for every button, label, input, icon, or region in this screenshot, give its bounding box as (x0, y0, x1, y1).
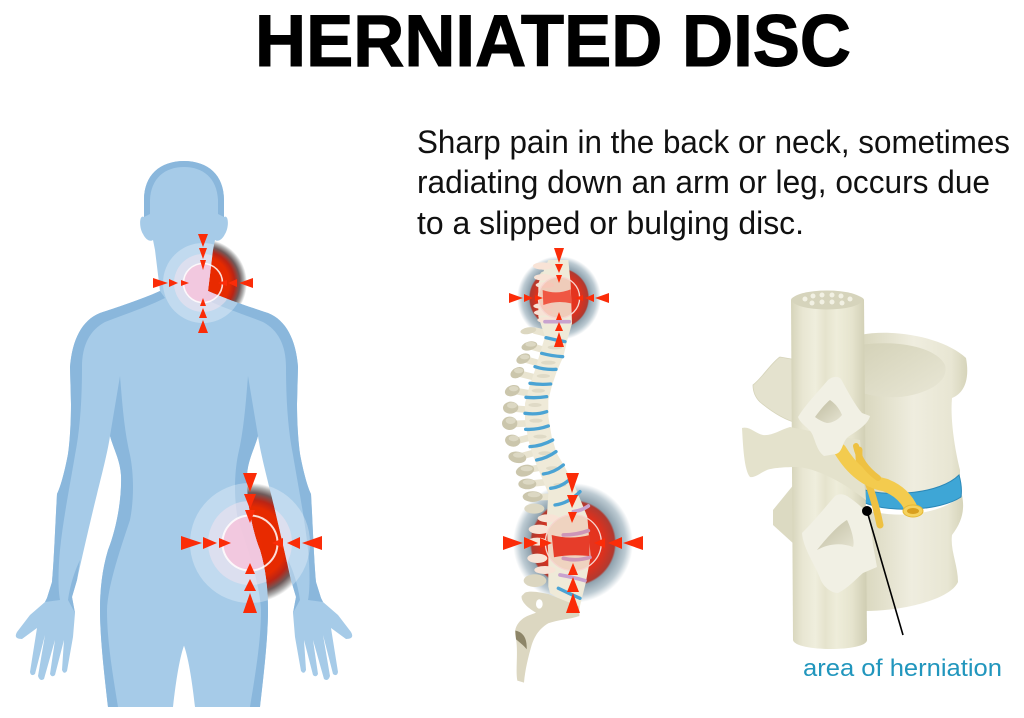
lumbar pain glow (513, 483, 633, 603)
lower facet (802, 494, 877, 593)
label: area of herniation: area of herniation (803, 655, 1002, 682)
pain rings on body (163, 243, 310, 603)
lumbar spine arrows (503, 473, 643, 613)
neck pain glow behind body (159, 239, 247, 327)
spine illustration (502, 260, 601, 683)
description text (417, 124, 1010, 241)
process necks (511, 266, 560, 497)
spinous processes (502, 326, 544, 514)
panel: vertebra cross-section (742, 290, 1002, 682)
nerve roots (840, 446, 912, 525)
left upper process (753, 357, 797, 423)
lower wing process (773, 483, 795, 545)
description text: radiating down an arm or leg, occurs due (417, 164, 990, 200)
cord top with fibre dots (792, 290, 862, 310)
vertebral shading (528, 345, 567, 487)
upper spine pain glow (517, 256, 601, 340)
upper facet (798, 377, 870, 456)
panel: human body with pain points (16, 161, 352, 707)
blue intervertebral disc (865, 475, 961, 509)
lower back pain glow behind body (190, 483, 310, 603)
neck pain arrows (153, 234, 253, 333)
red overlay on upper spine (538, 277, 580, 318)
lavender discs in pain areas (545, 322, 590, 581)
lower back pain arrows (181, 473, 322, 613)
body shading bands (45, 161, 323, 707)
body silhouette (16, 161, 352, 707)
nerve opening (903, 505, 923, 517)
pink lumps in pain areas (524, 262, 559, 587)
sacrum and coccyx (515, 592, 579, 683)
title: HERNIATED DISC (255, 1, 851, 82)
white target rings (184, 264, 278, 570)
description text: to a slipped or bulging disc. (417, 205, 804, 241)
white target rings on spine (538, 277, 580, 318)
upper spine arrows (509, 248, 609, 347)
spinal cord cylinder (791, 292, 867, 649)
panel: spine with pain points (502, 248, 643, 683)
red overlay on lumbar spine (545, 515, 601, 571)
upper vertebra body (860, 333, 967, 496)
transverse process (742, 427, 866, 500)
blue discs (525, 338, 580, 598)
vertebra concavity (860, 343, 946, 397)
callout: herniation pointer (862, 506, 903, 635)
description text: Sharp pain in the back or neck, sometimes (417, 124, 1010, 160)
lower vertebra body (860, 495, 963, 611)
process highlights (506, 342, 540, 497)
vertebral column (525, 260, 591, 610)
